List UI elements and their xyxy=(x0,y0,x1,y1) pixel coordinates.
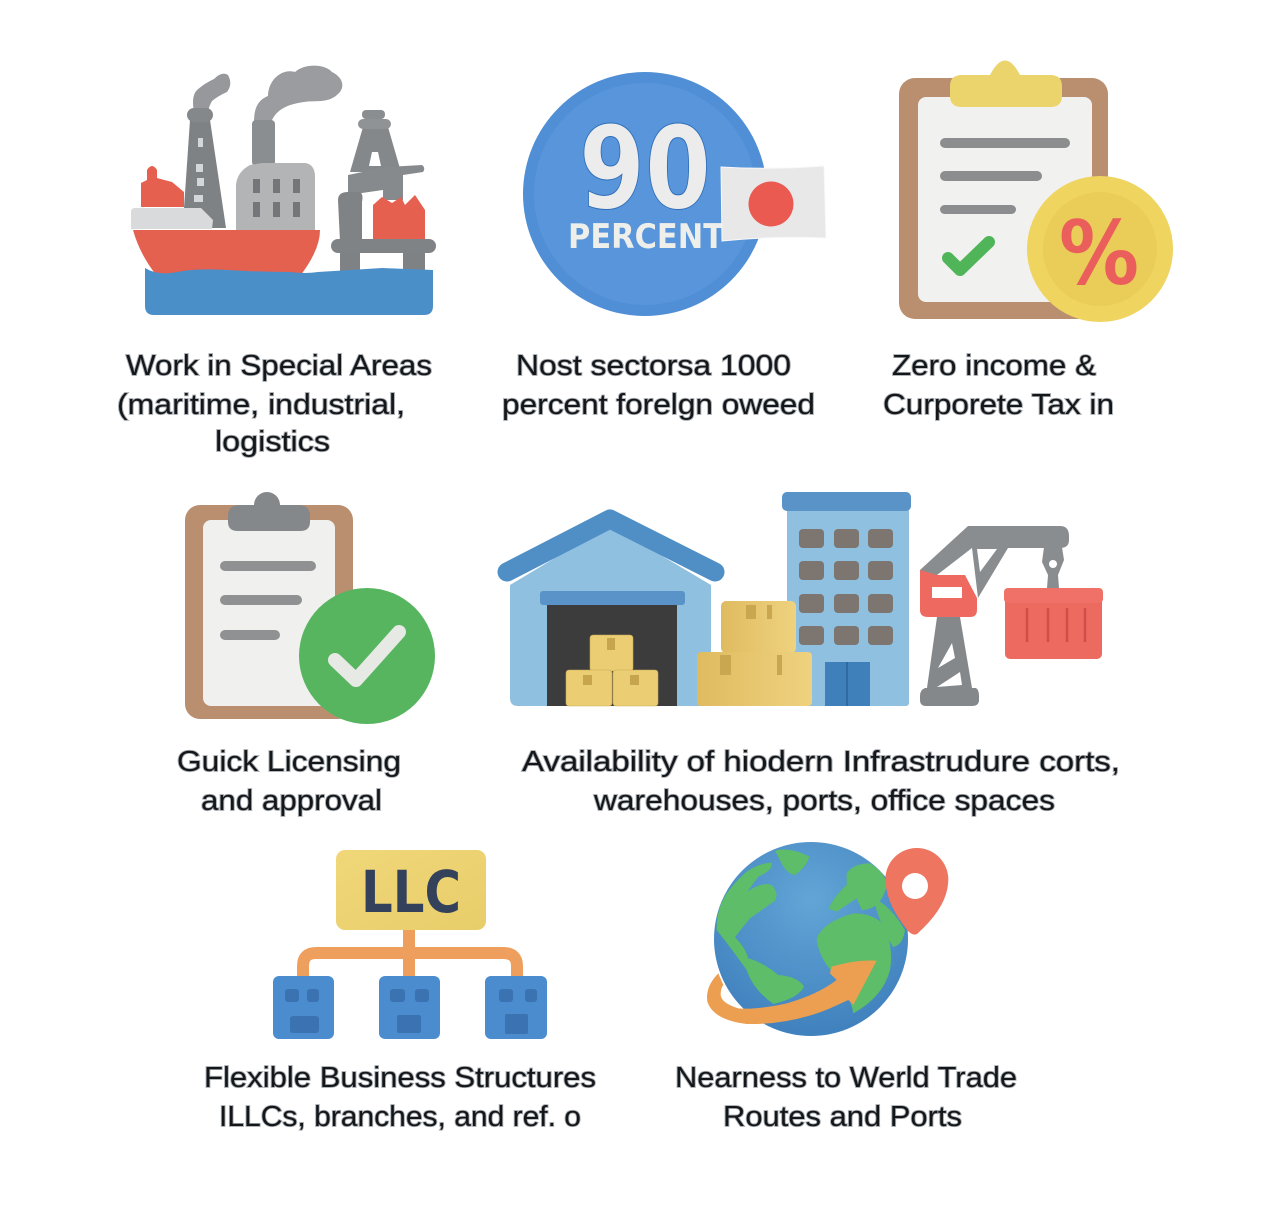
number 90: 90 xyxy=(579,102,711,235)
stacked boxes xyxy=(697,601,812,706)
crane xyxy=(920,526,1069,706)
continents xyxy=(717,850,891,1013)
branch box centre xyxy=(379,976,440,1039)
smoke from ship tower xyxy=(193,74,230,112)
connector lines xyxy=(303,928,517,978)
water xyxy=(145,268,433,315)
yellow clip xyxy=(950,60,1062,107)
icon: clipboard with percent coin xyxy=(899,60,1173,322)
icon: warehouse, boxes, office and crane xyxy=(507,492,1103,706)
office tower xyxy=(782,492,911,706)
land over pin xyxy=(873,898,905,947)
grey clip xyxy=(228,492,310,531)
badge: 90 percent with flag xyxy=(523,72,826,316)
check mark xyxy=(948,242,989,270)
caption: business structures: ILLCs, branches, and ref. o xyxy=(219,1101,581,1133)
text lines xyxy=(220,561,316,640)
ship hull xyxy=(133,230,320,276)
caption: special areas: logistics xyxy=(215,426,330,458)
caption: quick licensing xyxy=(177,746,401,817)
icon: ship, factory and oil rig xyxy=(131,66,436,315)
clipboard board xyxy=(899,78,1108,319)
LLC sign xyxy=(336,850,486,930)
caption: business structures: Flexible Business Structures xyxy=(204,1062,596,1094)
percent coin xyxy=(1027,176,1173,322)
factory chimney xyxy=(252,120,275,166)
crane cab xyxy=(920,570,977,617)
paper xyxy=(203,520,335,706)
LLC sign: LLC xyxy=(361,858,461,926)
crane tower xyxy=(920,617,979,706)
paper xyxy=(918,97,1092,302)
caption: foreign owned: Nost sectorsa 1000 xyxy=(516,350,791,382)
caption: trade routes: Routes and Ports xyxy=(723,1101,962,1133)
caption: special areas xyxy=(117,350,432,458)
icon: LLC org chart xyxy=(273,850,547,1039)
blue coin xyxy=(523,72,767,316)
caption: business structures xyxy=(204,1062,596,1133)
caption: foreign owned: percent forelgn oweed xyxy=(502,389,815,421)
crane boom xyxy=(920,526,1069,598)
text lines xyxy=(940,138,1070,214)
location pin xyxy=(885,848,948,935)
caption: quick licensing: and approval xyxy=(201,785,382,817)
globe xyxy=(714,842,908,1036)
green check badge xyxy=(299,588,435,724)
caption: zero tax: Curporete Tax in xyxy=(883,389,1114,421)
caption: special areas: Work in Special Areas xyxy=(126,350,432,382)
ship lattice tower xyxy=(184,108,226,228)
flag xyxy=(721,166,826,241)
factory building xyxy=(236,163,315,230)
caption: zero tax: Zero income & xyxy=(892,350,1096,382)
boxes in warehouse door xyxy=(566,635,658,706)
oil rig xyxy=(331,110,436,274)
ship bridge xyxy=(131,166,213,229)
caption: special areas: (maritime, industrial, xyxy=(117,389,405,421)
caption: infrastructure: Availability of hiodern Infrastrudure corts, xyxy=(522,746,1120,778)
icon: globe with pin and arrow xyxy=(707,842,948,1036)
percent label: PERCENT xyxy=(568,217,725,257)
factory smoke xyxy=(254,66,342,122)
caption: zero tax xyxy=(883,350,1114,421)
caption: infrastructure xyxy=(522,746,1120,817)
branch box right xyxy=(485,976,547,1039)
percent coin: % xyxy=(1059,202,1139,305)
warehouse xyxy=(507,519,715,706)
clipboard board xyxy=(185,505,353,719)
orbit arrow xyxy=(707,960,877,1024)
caption: infrastructure: warehouses, ports, office spaces xyxy=(593,785,1055,817)
shipping container xyxy=(1004,588,1103,659)
caption: trade routes: Nearness to Werld Trade xyxy=(675,1062,1017,1094)
icon: clipboard with green check xyxy=(185,492,435,724)
caption: quick licensing: Guick Licensing xyxy=(177,746,401,778)
crane hook xyxy=(1042,547,1064,588)
branch box left xyxy=(273,976,334,1039)
caption: foreign owned xyxy=(502,350,815,421)
caption: trade routes xyxy=(675,1062,1017,1133)
